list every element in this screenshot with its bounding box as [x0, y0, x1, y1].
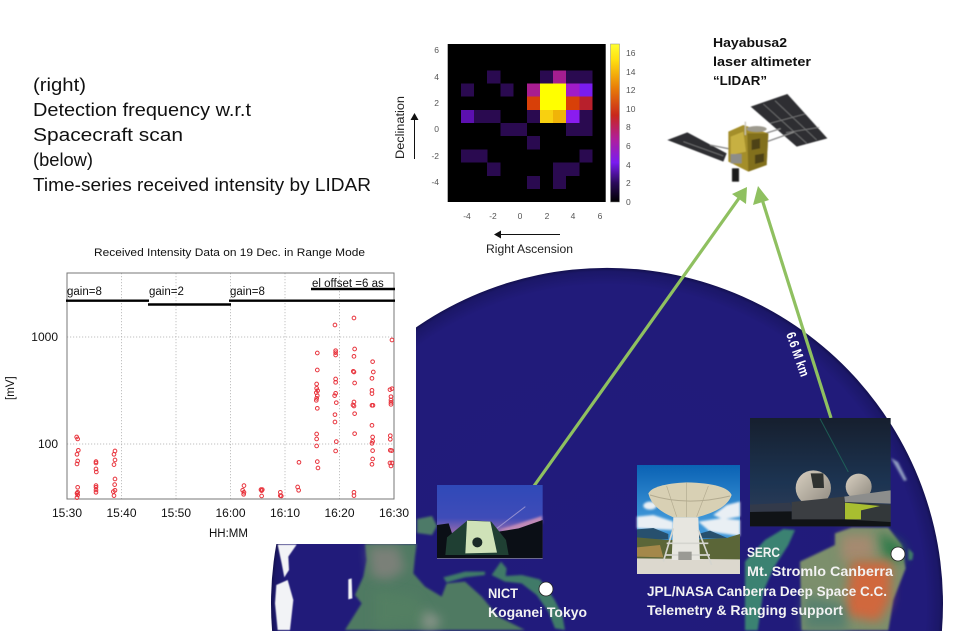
- y axis labels: 4: [434, 72, 439, 82]
- y axis labels: [431, 45, 439, 187]
- text block: description: Detection frequency w.r.t: [33, 100, 251, 120]
- y axis labels: 100: [38, 437, 58, 451]
- site marker: SERC: [891, 547, 905, 561]
- globe: [271, 268, 943, 631]
- text block: description: (right): [33, 75, 86, 95]
- colour bar labels: 6: [626, 141, 631, 151]
- label: SERC: SERC: [747, 545, 780, 560]
- text block: description: [33, 75, 371, 195]
- label: SERC: [747, 545, 894, 579]
- text block: description: Time-series received intensity by LIDAR: [33, 175, 371, 195]
- land: south-east Asia and New Guinea: [345, 544, 565, 630]
- arrow: right ascension: [494, 230, 560, 238]
- chart title: Received Intensity Data on 19 Dec. in Range Mode: [94, 247, 365, 259]
- label: NICT: NICT: [488, 586, 519, 601]
- pink horizon: [499, 516, 542, 533]
- booms: [710, 129, 794, 149]
- spacecraft label: [713, 35, 811, 88]
- x axis labels: 6: [598, 211, 603, 221]
- foreground: [750, 511, 891, 526]
- x axis labels: 15:50: [161, 506, 191, 520]
- arrow: link from SERC: [753, 186, 831, 418]
- laser beam: [497, 507, 525, 528]
- ground: [637, 534, 740, 560]
- y axis labels: 2: [434, 98, 439, 108]
- x axis labels: 2: [545, 211, 550, 221]
- spacecraft label: laser altimeter: [713, 54, 811, 69]
- dome: [445, 520, 509, 555]
- gain labels: gain=8: [67, 286, 102, 298]
- x axis labels: 16:30: [379, 506, 409, 520]
- body: [728, 125, 768, 172]
- dome opening: [465, 521, 497, 553]
- distance label: 6.6 M km: [783, 330, 812, 378]
- plot frame: [67, 273, 394, 499]
- laser beam: [820, 419, 848, 472]
- x axis labels: 16:10: [270, 506, 300, 520]
- x axis title: HH:MM: [209, 528, 248, 540]
- colour bar labels: 4: [626, 160, 631, 170]
- colour bar labels: [626, 48, 636, 207]
- x axis labels: -4: [463, 211, 471, 221]
- photo: JPL/NASA Canberra antenna: [637, 465, 740, 574]
- label: JPL/NASA: JPL/NASA Canberra Deep Space C.C.: [647, 584, 887, 599]
- y axis labels: -4: [431, 177, 439, 187]
- sensor block: [731, 154, 742, 163]
- y axis labels: 1000: [31, 330, 58, 344]
- dish: [648, 482, 732, 517]
- heatmap cells: [461, 70, 593, 189]
- x axis labels: 15:40: [106, 506, 137, 520]
- text block: description: (below): [33, 150, 93, 170]
- x axis labels: 15:30: [52, 506, 82, 520]
- colour bar labels: 0: [626, 197, 631, 207]
- colour bar labels: 12: [626, 85, 636, 95]
- land: small island: [417, 516, 437, 535]
- y axis labels: -2: [431, 151, 439, 161]
- pedestal: [672, 517, 700, 560]
- colour bar labels: 16: [626, 48, 636, 58]
- site marker: NICT: [539, 582, 553, 596]
- label: JPL/NASA: Telemetry & Ranging support: [647, 603, 844, 618]
- high gain antenna: [747, 126, 767, 132]
- grid lines: [67, 273, 394, 499]
- colour bar labels: 2: [626, 178, 631, 188]
- heatmap panel: [395, 44, 636, 256]
- land: limb cloud: [891, 458, 907, 481]
- land: Australia region: [745, 528, 913, 630]
- gain labels: [67, 278, 384, 298]
- building: [792, 497, 845, 520]
- y axis labels: [31, 330, 58, 451]
- domes: [796, 470, 831, 506]
- gain labels: gain=8: [230, 286, 265, 298]
- solar panel left: [667, 132, 727, 162]
- text block: description: Spacecraft scan: [33, 125, 183, 145]
- hills: [637, 528, 728, 539]
- colour bar labels: 10: [626, 104, 636, 114]
- label: NICT: [488, 586, 587, 620]
- x axis labels: 0: [518, 211, 523, 221]
- spacecraft label: “LIDAR”: [713, 73, 767, 88]
- photo: NICT observatory: [437, 485, 543, 558]
- x axis labels: 16:20: [324, 506, 355, 520]
- colour bar labels: 14: [626, 67, 636, 77]
- gain labels: el offset =6 as: [312, 278, 384, 290]
- spacecraft label: Hayabusa2: [713, 35, 787, 50]
- solar panel right: [751, 94, 827, 147]
- gain bars: [66, 289, 395, 304]
- x axis labels: 4: [571, 211, 576, 221]
- colour bar labels: 8: [626, 122, 631, 132]
- x axis labels: 16:00: [215, 506, 246, 520]
- y axis title: [mV]: [5, 376, 17, 400]
- x axis labels: [52, 506, 409, 520]
- trees: [437, 520, 543, 558]
- white backing of the chart: [0, 230, 416, 544]
- arrow: declination: [410, 113, 418, 159]
- arrow: link from NICT: [534, 187, 747, 486]
- distant hills: [750, 503, 793, 512]
- label: NICT: Koganei Tokyo: [488, 605, 587, 620]
- heatmap background: [448, 44, 606, 202]
- chart: received intensity time series: [5, 247, 409, 540]
- label: JPL/NASA: [647, 584, 887, 618]
- axis title: right ascension: Right Ascension: [486, 244, 573, 256]
- axis title: declination: Declination: [395, 96, 407, 159]
- clouds: [637, 502, 740, 536]
- icon: Hayabusa2 spacecraft: [667, 94, 827, 182]
- photo: SERC Mt. Stromlo: [750, 418, 891, 526]
- x axis labels: -2: [489, 211, 497, 221]
- label: SERC: Mt. Stromlo Canberra: [747, 564, 894, 579]
- lower instrument: [732, 168, 739, 182]
- data points: [75, 316, 394, 499]
- gain labels: gain=2: [149, 286, 184, 298]
- land: limb clouds: [275, 545, 352, 630]
- y axis labels: 0: [434, 124, 439, 134]
- x axis labels: [463, 211, 603, 221]
- colour bar: [610, 44, 620, 202]
- y axis labels: 6: [434, 45, 439, 55]
